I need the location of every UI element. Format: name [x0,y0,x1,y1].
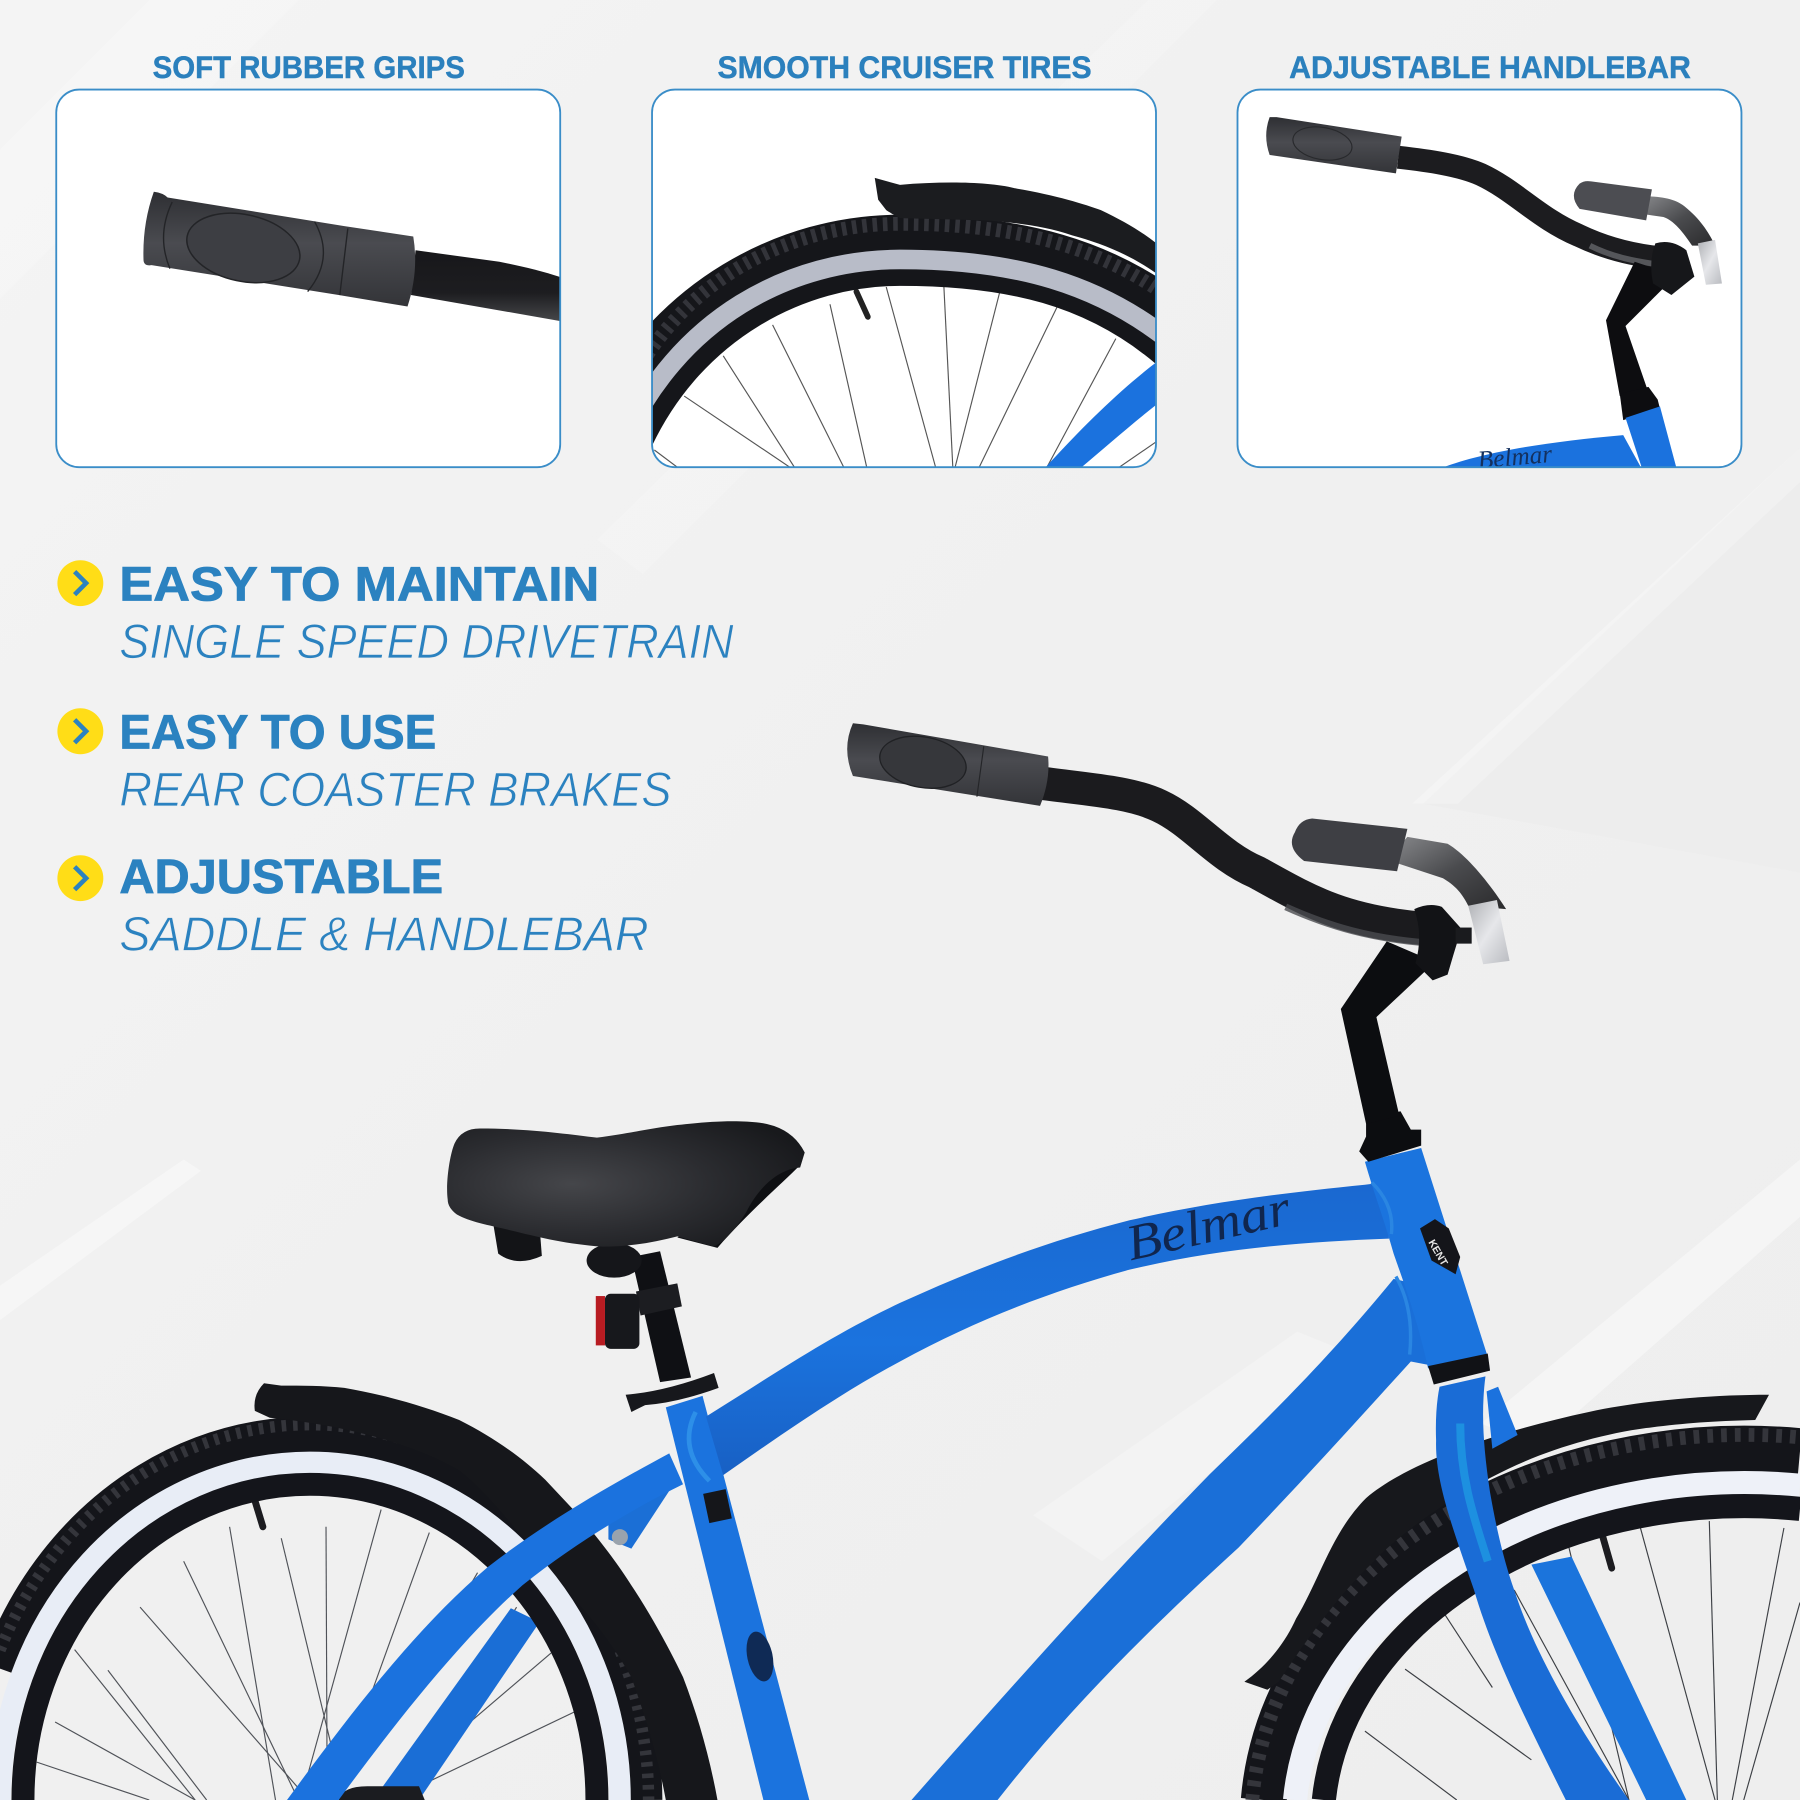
saddle [447,1121,805,1278]
rear fender [254,1383,717,1800]
heading: ADJUSTABLE [119,850,443,904]
handlebar [1039,783,1426,929]
head tube [1365,1148,1488,1368]
rear handlebar and grip [1292,818,1506,909]
blue frame tube [1045,362,1157,468]
front spokes [1365,1521,1800,1800]
front valve [1603,1536,1612,1568]
down tube [911,1279,1435,1800]
head badge [1420,1219,1460,1274]
feature: easy to use [57,705,672,817]
stem [1606,262,1662,396]
fork blade [1436,1376,1629,1800]
frame script logo: Belmar [1121,1179,1296,1271]
rear grip and bar [1574,181,1715,246]
heading: EASY TO USE [119,705,436,759]
fork highlight [1460,1423,1488,1561]
front fork rear blade [1531,1557,1686,1800]
icon: chevron bullet [57,855,103,901]
front fender [1244,1395,1769,1690]
panel: soft rubber grips [56,90,562,467]
head badge: KENT [1425,1238,1449,1269]
handlebar sheen [1590,246,1665,265]
clamp to reflector mount [1456,928,1472,944]
head tube weld [1372,1182,1411,1355]
upper headset [1359,1111,1421,1162]
handlebar sheen [1286,907,1421,942]
front tire [1252,1435,1800,1800]
rubber grip [143,192,415,307]
handlebar tube [411,250,562,321]
fender [875,178,1159,276]
lower headset ring [1428,1353,1490,1384]
frame [1626,406,1677,471]
seat post [631,1251,691,1382]
rear valve [255,1500,263,1527]
top tube [706,1182,1389,1475]
handlebar [1398,157,1667,258]
caption: smooth cruiser tires: SMOOTH CRUISER TIRES [717,49,1092,85]
grip [1266,117,1402,173]
seat tube [666,1396,809,1800]
bottom chain guard [339,1786,425,1800]
caption: adjustable handlebar: ADJUSTABLE HANDLEBAR [1289,49,1691,85]
frame script logo: Belmar [1477,440,1553,474]
subheading: SADDLE & HANDLEBAR [119,908,649,962]
seat tube decal [703,1489,732,1523]
main grip [847,723,1049,806]
seat cluster weld [689,1412,709,1481]
reflector [1698,240,1722,285]
clamp [1651,242,1694,295]
bicycle illustration [0,723,1800,1800]
subheading: REAR COASTER BRAKES [119,763,672,817]
rear arched stay [287,1453,683,1800]
seat tube round decal [742,1629,778,1684]
heading: EASY TO MAINTAIN [119,557,599,611]
reflector [1468,900,1510,964]
whitewall [652,250,1156,406]
handlebar clamp [1414,905,1461,980]
headset ring [1620,387,1660,420]
caption: soft rubber grips: SOFT RUBBER GRIPS [153,49,465,85]
stem [1341,941,1435,1124]
spokes [654,281,1156,467]
tire [620,250,1182,430]
feature: adjustable [57,850,649,962]
upper seat stay and bracket [608,1479,677,1549]
subheading: SINGLE SPEED DRIVETRAIN [119,615,734,669]
rear tire [0,1425,649,1800]
seat clamp [626,1373,719,1412]
panel: smooth cruiser tires [620,90,1182,468]
rear light [596,1294,639,1349]
rear spokes [37,1510,577,1800]
icon: chevron bullet [57,708,103,754]
icon: chevron bullet [57,560,103,606]
feature: easy to maintain [57,557,734,669]
valve [856,292,868,317]
fork bracket [1487,1387,1518,1449]
rear lower stay [373,1608,540,1800]
panel: adjustable handlebar [1238,90,1741,474]
